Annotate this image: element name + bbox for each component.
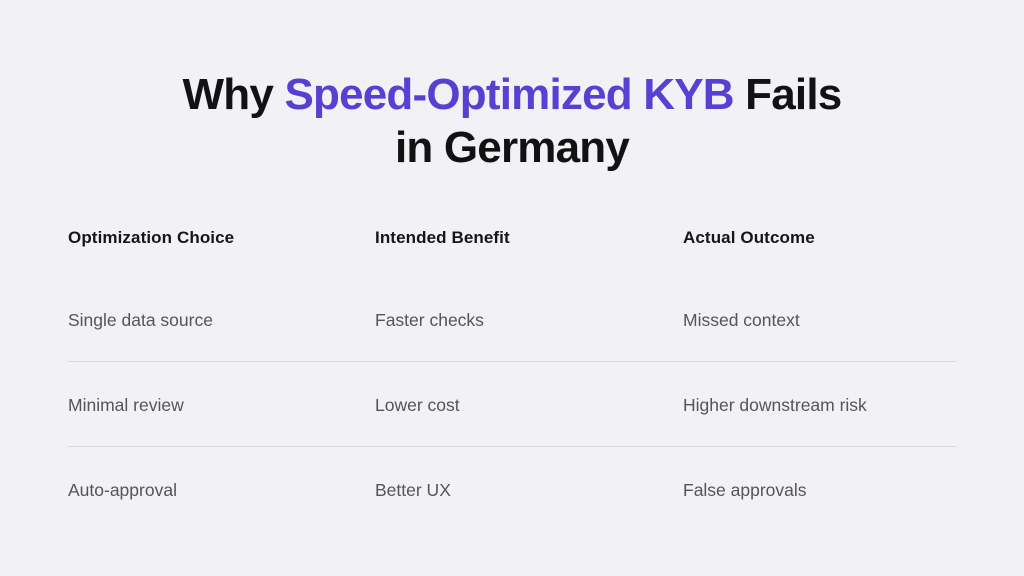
row 2: Higher downstream risk	[683, 395, 867, 415]
row 2: Lower cost	[375, 395, 460, 415]
header: optimization choice: Optimization Choice	[68, 228, 234, 247]
row 3	[68, 480, 807, 500]
title	[182, 70, 841, 172]
row 2: Minimal review	[68, 395, 184, 415]
row 1	[68, 310, 800, 330]
row 2	[68, 395, 867, 415]
row 3: Auto-approval	[68, 480, 177, 500]
row 3: Better UX	[375, 480, 451, 500]
header: actual outcome: Actual Outcome	[683, 228, 815, 247]
row 1: Missed context	[683, 310, 800, 330]
title: in Germany	[395, 123, 629, 172]
title: Why Speed-Optimized KYB Fails	[183, 70, 841, 119]
row 1: Faster checks	[375, 310, 484, 330]
row 3: False approvals	[683, 480, 807, 500]
row 1: Single data source	[68, 310, 213, 330]
header: intended benefit: Intended Benefit	[375, 228, 510, 247]
